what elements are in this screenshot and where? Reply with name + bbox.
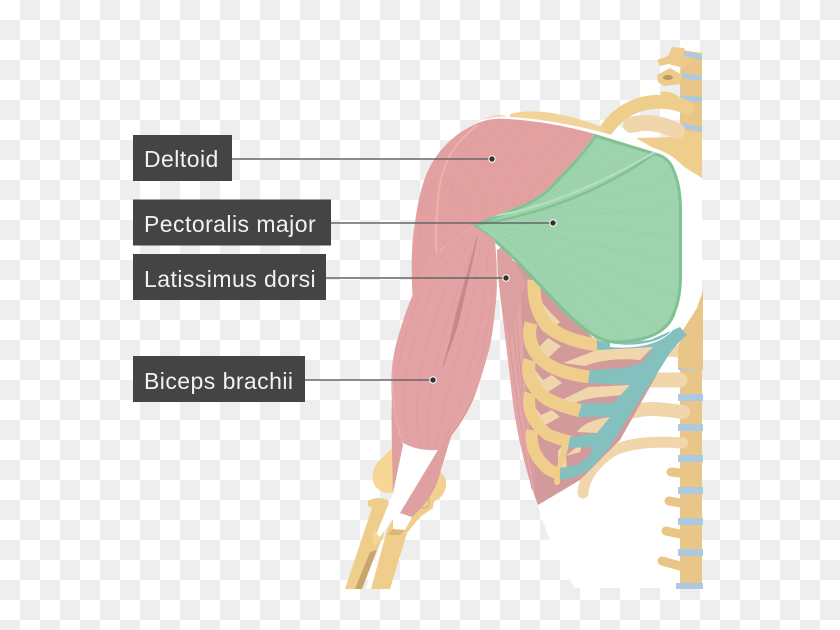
biceps central groove (443, 237, 477, 367)
spinous processes (662, 472, 680, 566)
pectoralis fibres (490, 137, 682, 345)
biceps brachii muscle (391, 225, 497, 517)
pectoralis major muscle (472, 134, 682, 345)
costal cartilage (teal) (560, 327, 687, 480)
ulna (345, 498, 389, 589)
radius (371, 500, 434, 589)
bone shadow (355, 550, 377, 589)
humerus medial lobe (373, 448, 400, 493)
leader line: Biceps brachii (305, 377, 436, 383)
pale tendon tip (373, 530, 380, 546)
vertebral hole (663, 75, 673, 80)
latissimus dorsi back muscle (497, 250, 668, 505)
label: Deltoid: Deltoid (144, 146, 219, 172)
label: Latissimus dorsi (133, 254, 509, 300)
back ribs (583, 350, 683, 493)
latissimus upper tendon (497, 245, 526, 340)
gap between forearm bones (366, 540, 384, 589)
intervertebral discs (676, 51, 703, 589)
deltoid ridge (436, 125, 478, 255)
white shoulder outline (478, 117, 702, 347)
acromion bump (482, 115, 506, 125)
label: Latissimus dorsi: Latissimus dorsi (144, 266, 316, 292)
first rib cartilage (631, 123, 677, 131)
latissimus strip (497, 250, 538, 505)
label: Deltoid (133, 135, 495, 181)
torso white backdrop (520, 125, 702, 588)
second vertebra (657, 68, 684, 86)
deltoid muscle (412, 119, 595, 305)
clavicular division (475, 153, 655, 225)
spine (657, 47, 703, 589)
label: Biceps brachii: Biceps brachii (144, 368, 293, 394)
first rib arch (606, 102, 687, 130)
leader line: Pectoralis major (331, 220, 556, 226)
white notch under pectoralis (610, 325, 676, 348)
humerus lateral lobe (410, 470, 446, 506)
leader line: Deltoid (232, 156, 495, 162)
label: Pectoralis major (133, 200, 556, 246)
label: Pectoralis major: Pectoralis major (144, 211, 316, 237)
ribs (529, 280, 598, 482)
sternum yellow wedge (678, 290, 703, 370)
elbow and forearm bones (345, 448, 446, 589)
sternum yellow block (636, 130, 702, 178)
biceps tendon white (376, 443, 438, 537)
rib cartilage bands (533, 300, 653, 478)
label: Biceps brachii (133, 356, 436, 402)
shoulder bone top (510, 111, 606, 138)
leader line: Latissimus dorsi (326, 275, 509, 281)
upper neck lump (660, 92, 688, 114)
upper vertebra (657, 47, 690, 68)
